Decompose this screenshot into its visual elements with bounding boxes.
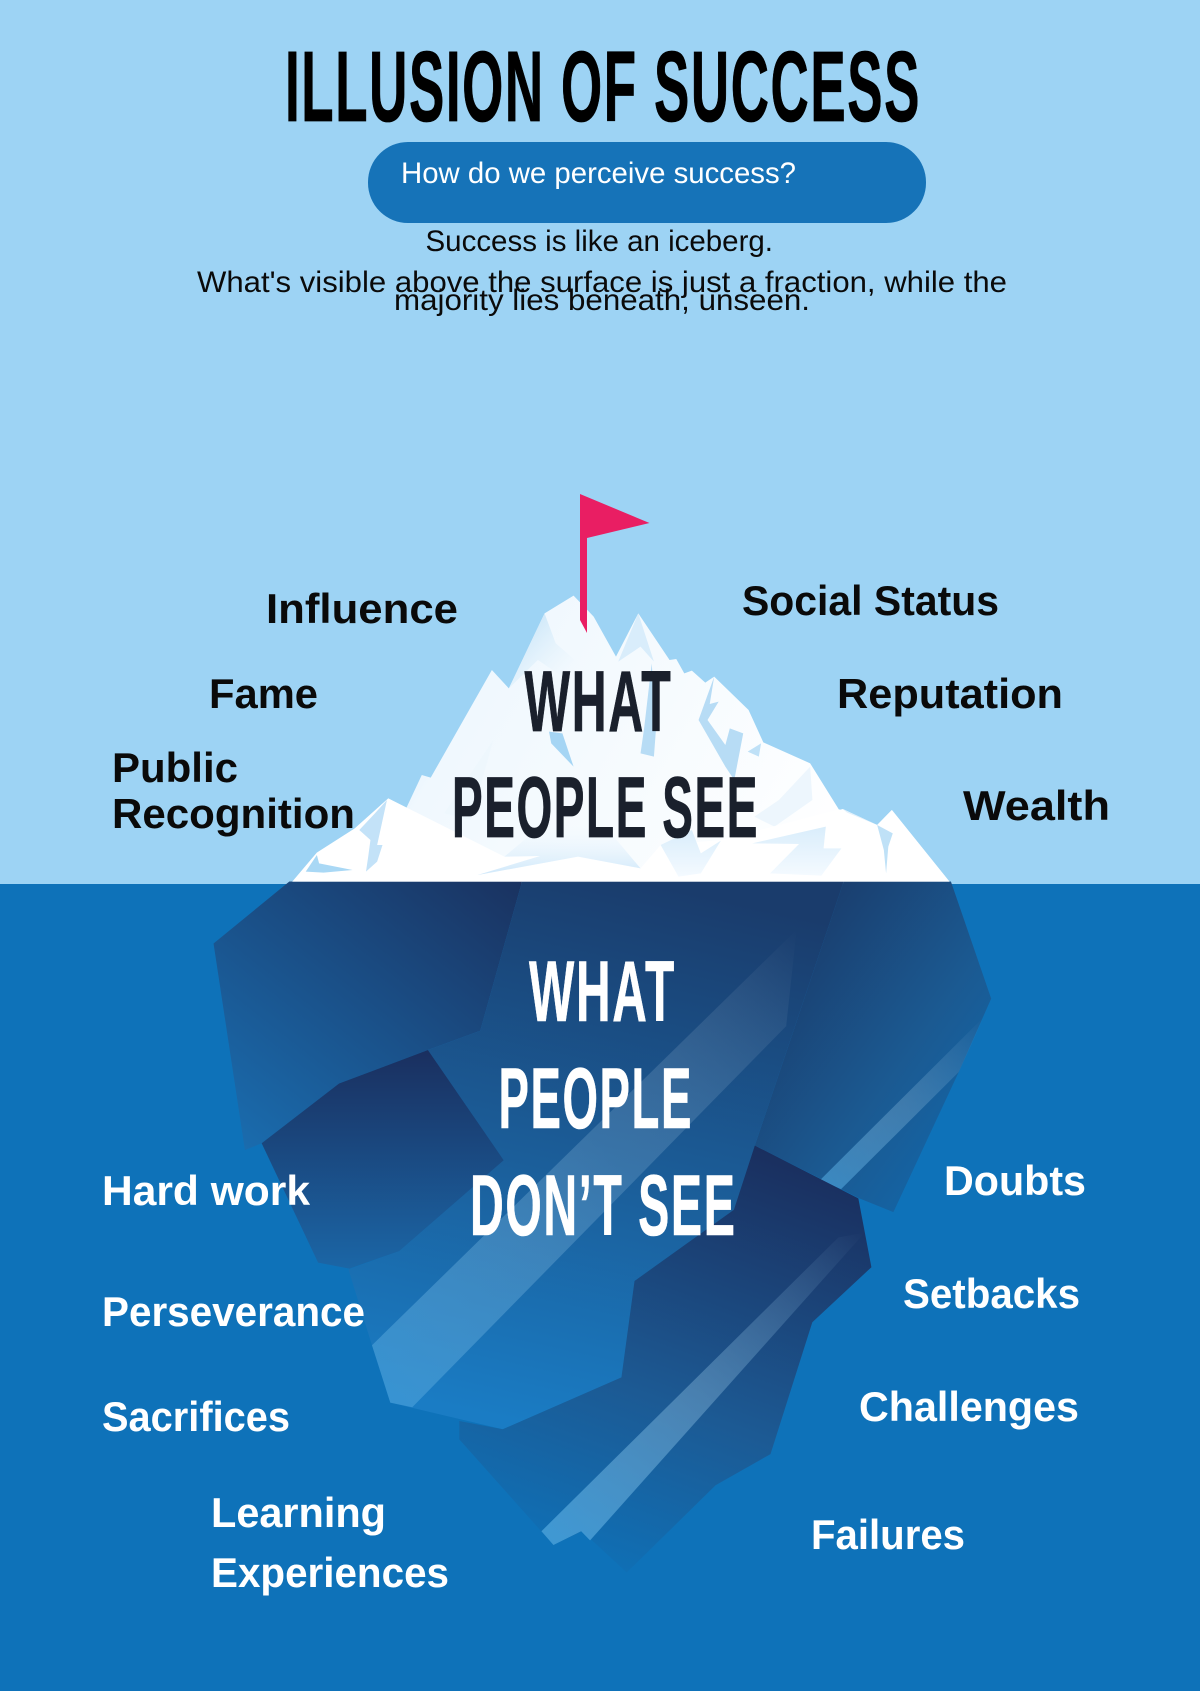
label: public recognition: Recognition xyxy=(112,790,355,837)
water background xyxy=(0,884,1200,1691)
subtitle text: How do we perceive success? xyxy=(401,157,796,190)
facet: middle left xyxy=(262,1050,504,1269)
label: learning experiences xyxy=(211,1489,449,1596)
intro text block: Success is like an iceberg. xyxy=(426,225,773,258)
facet: lower right xyxy=(459,1146,871,1573)
highlight: center strip xyxy=(372,930,797,1407)
heading: what people don't see xyxy=(470,944,736,1254)
label: challenges: Challenges xyxy=(859,1383,1079,1430)
intro text block: What's visible above the surface is just a fraction, while the xyxy=(197,266,1007,299)
facet: center xyxy=(348,881,844,1429)
heading: what people see: PEOPLE SEE xyxy=(452,760,759,856)
label: perseverance: Perseverance xyxy=(102,1288,365,1335)
shaded facets xyxy=(444,613,893,873)
label: public recognition xyxy=(112,744,355,837)
facet: back right xyxy=(755,881,991,1212)
heading: what people don't see: DON’T SEE xyxy=(470,1158,736,1254)
label: doubts: Doubts xyxy=(944,1157,1086,1204)
iceberg tip xyxy=(292,596,949,882)
label: social status: Social Status xyxy=(742,577,999,624)
label: sacrifices: Sacrifices xyxy=(102,1393,290,1440)
subtitle pill xyxy=(368,142,926,223)
label: learning experiences: Learning xyxy=(211,1489,386,1536)
label: wealth: Wealth xyxy=(963,782,1110,829)
heading: what people don't see: PEOPLE xyxy=(498,1051,693,1147)
iceberg underwater xyxy=(214,881,991,1573)
label: fame: Fame xyxy=(209,670,318,717)
highlight: lower strip xyxy=(541,1233,865,1545)
heading: what people see: WHAT xyxy=(524,654,672,750)
sky background xyxy=(0,0,1200,884)
label: hard work: Hard work xyxy=(102,1167,311,1214)
visible labels xyxy=(112,577,1110,837)
heading: what people don't see: WHAT xyxy=(529,944,676,1040)
hidden labels xyxy=(102,1157,1086,1596)
facet: back left xyxy=(214,881,522,1150)
lower facets xyxy=(306,800,893,877)
label: setbacks: Setbacks xyxy=(903,1270,1080,1317)
label: influence: Influence xyxy=(266,585,458,632)
label: learning experiences: Experiences xyxy=(211,1549,449,1596)
label: reputation: Reputation xyxy=(837,670,1063,717)
highlight: right strip xyxy=(820,1017,984,1189)
intro text block: majority lies beneath, unseen. xyxy=(394,284,810,317)
label: public recognition: Public xyxy=(112,744,238,791)
label: failures: Failures xyxy=(811,1511,965,1558)
intro text block xyxy=(197,225,1007,317)
front ridge xyxy=(292,798,949,882)
flag xyxy=(580,494,650,633)
snow body xyxy=(292,596,949,882)
heading: what people see xyxy=(452,654,759,856)
